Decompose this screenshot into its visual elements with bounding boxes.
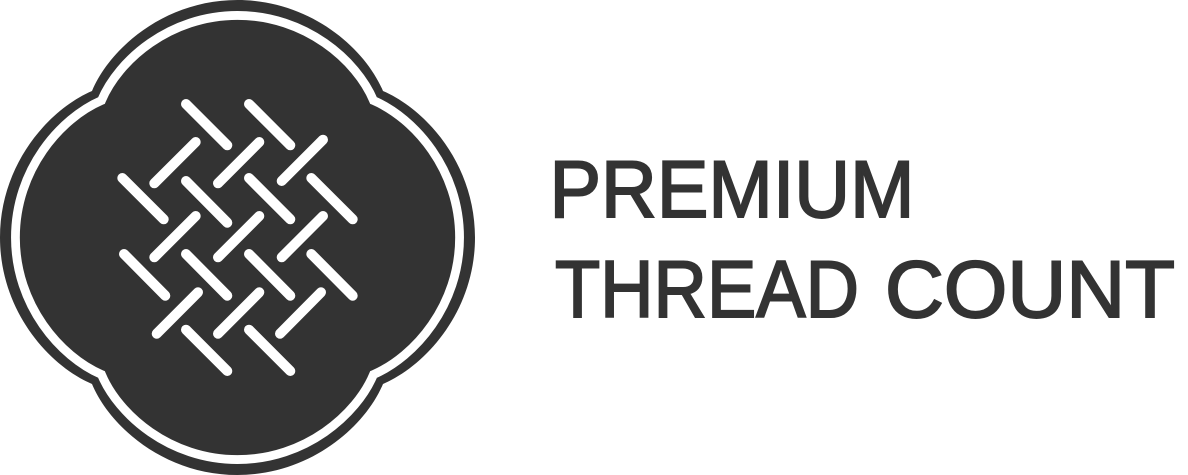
woven thread pattern bbox=[122, 104, 353, 371]
badge outer shape bbox=[0, 0, 475, 475]
badge inner white ring bbox=[15, 15, 460, 460]
icon: quatrefoil badge with woven threads bbox=[0, 0, 475, 475]
title line 2: THREAD bbox=[555, 245, 859, 335]
title line 1: PREMIUM bbox=[550, 145, 914, 235]
title line 2: COUNT bbox=[885, 245, 1175, 335]
title line 2 bbox=[555, 245, 1175, 335]
